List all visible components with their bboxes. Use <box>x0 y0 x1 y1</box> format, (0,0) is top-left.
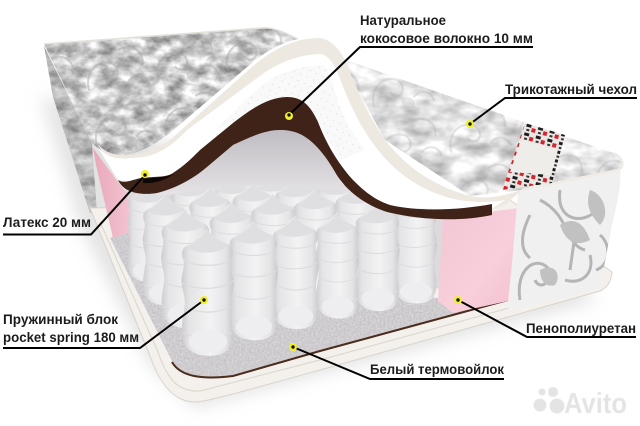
label: coconut fibre: кокосовое волокно 10 мм <box>360 31 533 46</box>
soft shadow under mattress <box>40 95 600 408</box>
leader: pocket spring <box>3 300 204 348</box>
marker: thermal felt <box>289 343 297 351</box>
label: coconut fibre <box>360 13 533 46</box>
marker: latex <box>141 170 149 178</box>
left top surface <box>44 26 300 158</box>
pink foam right <box>438 208 518 313</box>
left top surface edge <box>44 28 298 44</box>
right top surface edge <box>522 153 622 190</box>
folded cover band <box>97 38 522 210</box>
brand tag centre <box>510 140 558 175</box>
watermark: Avito: Avito <box>564 388 627 420</box>
label: knitted cover: Трикотажный чехол <box>505 82 637 97</box>
floor front edge lines <box>172 300 508 377</box>
label: pocket spring <box>3 312 139 345</box>
label: thermal felt: Белый термовойлок <box>370 362 504 377</box>
grey underside <box>157 130 375 207</box>
label: pocket spring: Пружинный блок <box>3 312 118 327</box>
label: latex: Латекс 20 мм <box>3 215 91 230</box>
leader: thermal felt <box>293 347 504 379</box>
label: coconut fibre: Натуральное <box>360 13 446 28</box>
white latex layer <box>97 54 505 210</box>
spring block <box>127 175 437 356</box>
interior back wall <box>125 190 445 290</box>
marker: cover <box>466 120 474 128</box>
brand tag <box>502 123 565 190</box>
foam base floor <box>110 232 468 376</box>
label: pocket spring: pocket spring 180 мм <box>3 330 139 345</box>
perforated latex <box>215 65 365 160</box>
fold shadow wedge <box>143 174 174 183</box>
watermark: Avito <box>534 387 627 420</box>
left side panel <box>44 46 96 213</box>
label: polyurethane foam: Пенополиуретан <box>526 321 636 336</box>
base frame <box>90 200 612 402</box>
right side panel with damask <box>508 170 620 309</box>
marker: pocket spring <box>200 296 208 304</box>
marker: coconut <box>285 112 293 120</box>
pink foam left <box>93 148 130 238</box>
base inner seam <box>100 222 600 391</box>
right top surface <box>346 60 621 196</box>
coconut fibre layer <box>118 97 492 219</box>
marker: polyurethane foam <box>454 296 462 304</box>
leader: cover <box>470 98 637 124</box>
leader: polyurethane foam <box>458 300 636 337</box>
leader: latex <box>3 175 145 234</box>
leader: coconut <box>289 47 533 115</box>
